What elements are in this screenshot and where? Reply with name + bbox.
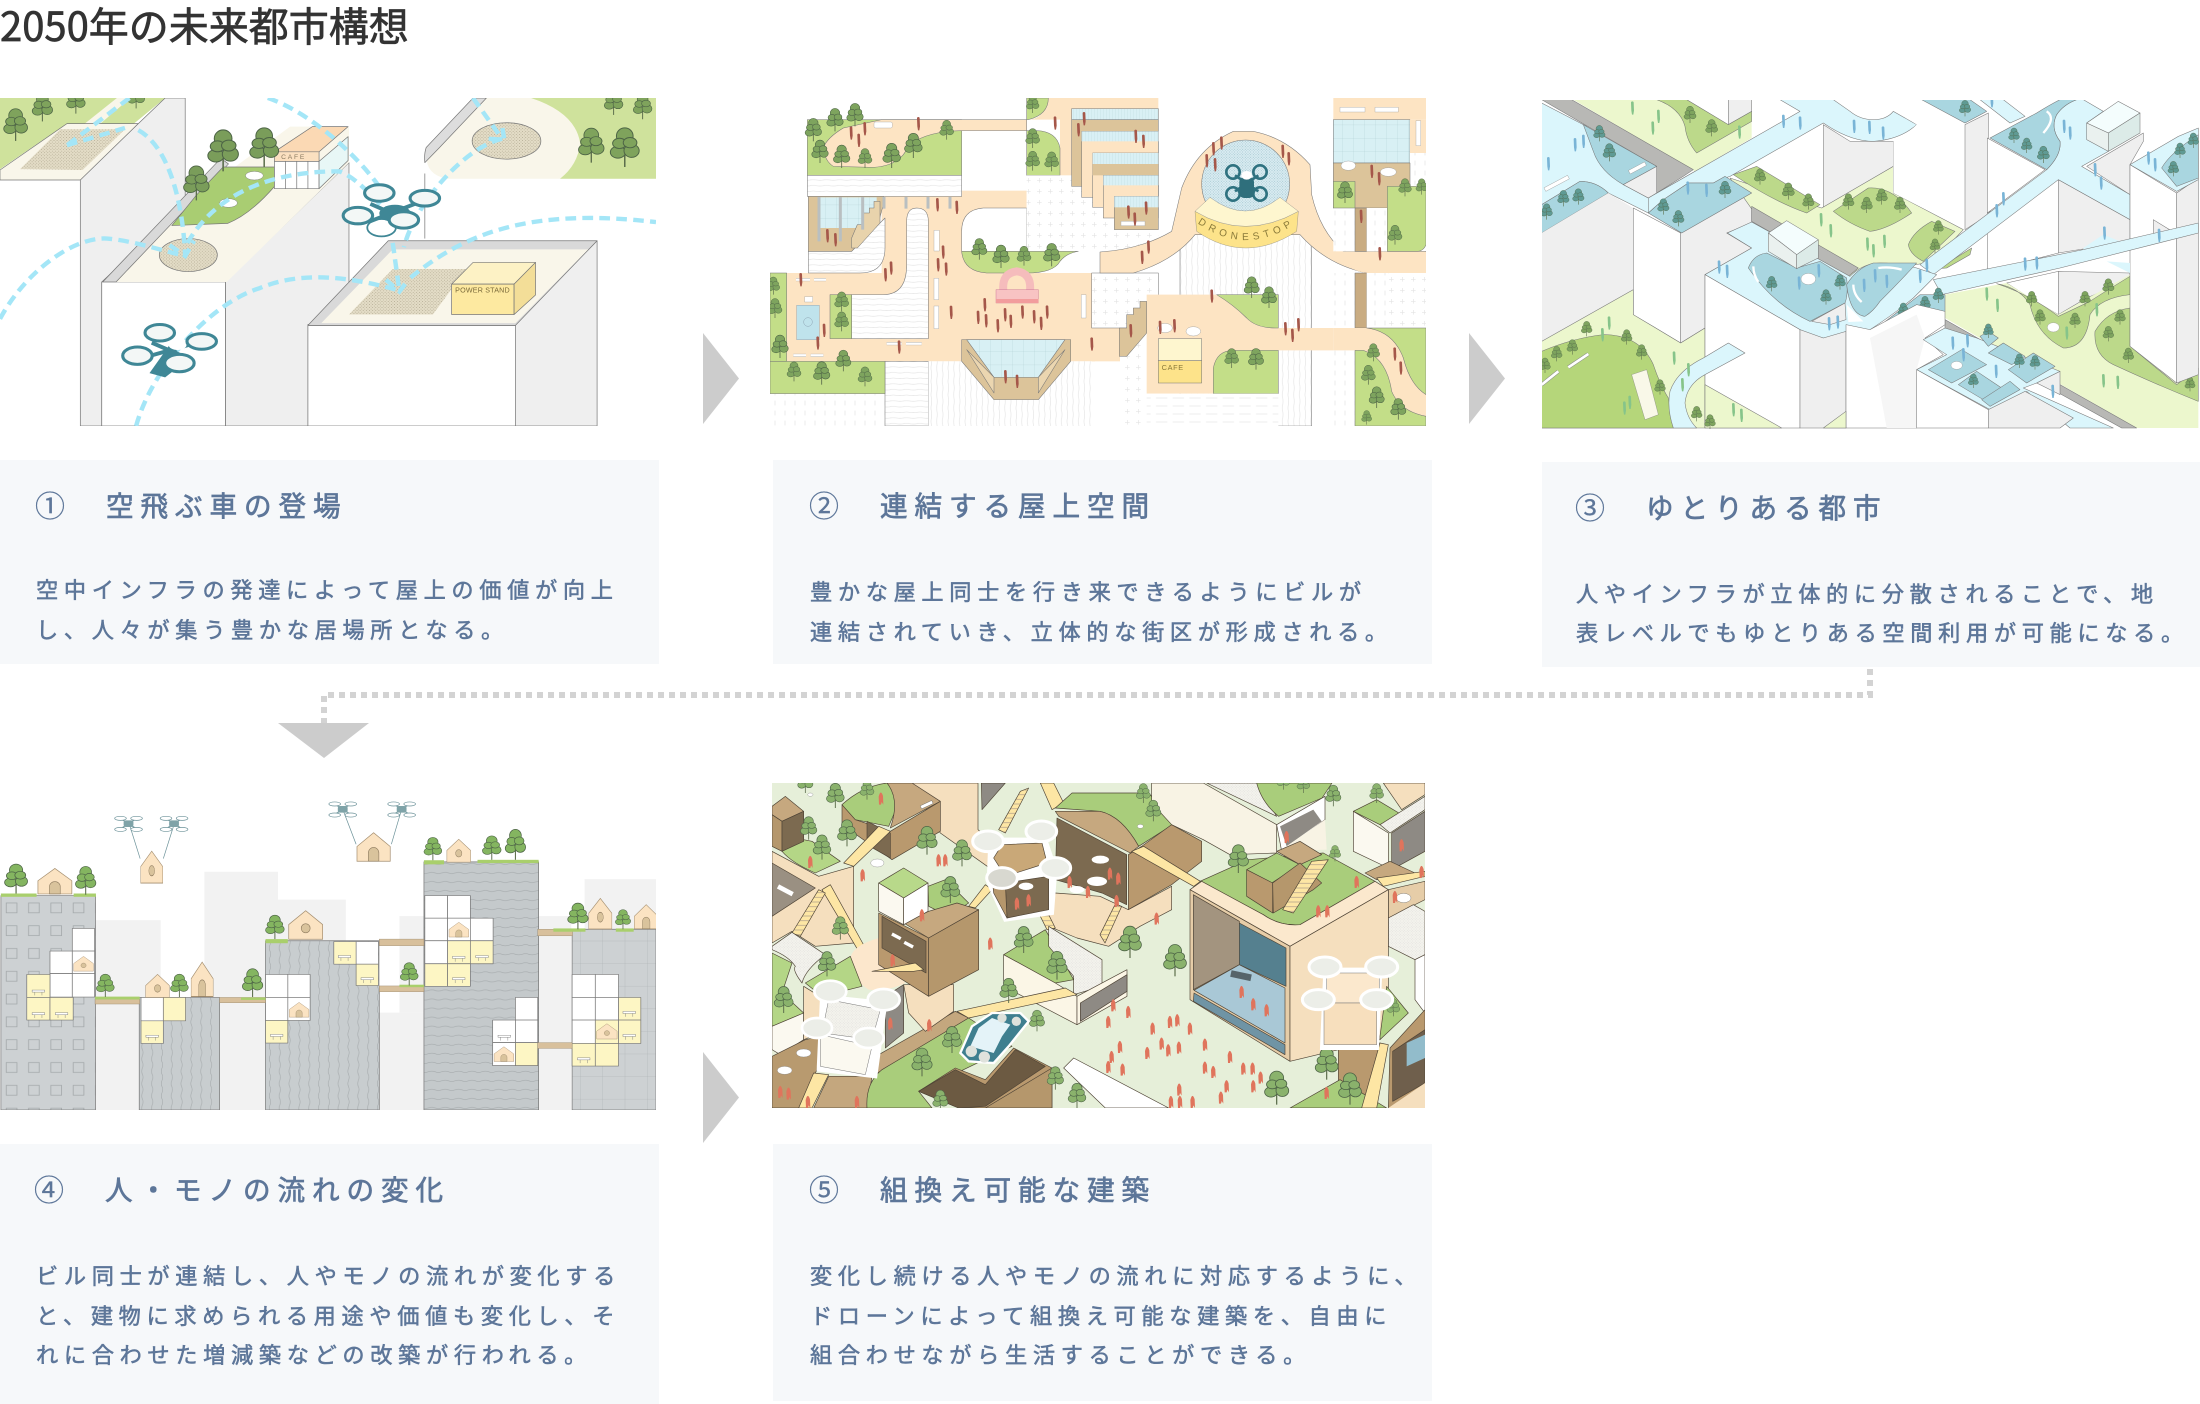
top ground and garden	[1573, 100, 1752, 171]
upper left boxes and lawns	[772, 783, 1064, 908]
flying car upper	[343, 185, 440, 236]
arrow down	[278, 723, 369, 758]
centre tall box with white cube	[872, 868, 979, 1048]
white hatched blocks	[770, 175, 1158, 426]
card 4: ④	[34, 1166, 64, 1210]
card 2	[773, 460, 1432, 664]
dark strip and left road	[1541, 100, 1695, 233]
top right rooftop	[425, 90, 656, 239]
arrow right 1	[703, 333, 739, 424]
trees	[774, 772, 1400, 1111]
illustration 5: reconfigurable modular architecture	[772, 783, 1425, 1108]
small tables	[777, 793, 1143, 1074]
ground	[772, 783, 1425, 1108]
terrace rows	[1072, 109, 1158, 230]
top left rooftop	[0, 85, 165, 180]
card 3: ③	[1575, 484, 1605, 528]
people	[799, 112, 1402, 388]
card 1: 空飛ぶ車の登場	[106, 484, 347, 524]
card 1	[0, 460, 659, 664]
cafe plaza: CAFE	[1162, 363, 1184, 372]
blue and green figures	[1547, 94, 2161, 422]
right building with power stand: POWER STAND	[455, 287, 510, 294]
central lawn	[962, 238, 1078, 273]
building 3	[266, 941, 399, 1110]
illustration 3: isometric spacious city	[1542, 100, 2199, 429]
stepped atrium upper left	[808, 196, 950, 251]
red figures	[778, 792, 1424, 1108]
upper right tower and crossing	[1920, 100, 2143, 275]
cafe plaza	[1119, 277, 1370, 426]
big open building	[1190, 841, 1388, 1061]
building 4	[424, 862, 539, 1110]
lower left ground and lawn	[1540, 290, 1705, 428]
card 5: ドローンによって組換え可能な建築を、自由に	[810, 1299, 1392, 1331]
card 2: 連結する屋上空間	[880, 484, 1156, 524]
drones lifting houses	[115, 802, 415, 883]
card 3: ゆとりある都市	[1646, 486, 1887, 526]
dashed flight paths	[0, 98, 656, 426]
pit building lower centre	[919, 1048, 1169, 1108]
sunken stepped plaza	[962, 340, 1071, 400]
illustration 1: rooftops and flying cars	[0, 98, 656, 426]
illustration 4: changing flow of people and goods skyline	[0, 802, 656, 1110]
flying car	[960, 1013, 1029, 1063]
background pale buildings	[95, 872, 656, 1110]
sports court and gardens left	[767, 273, 922, 394]
drone stop arc road: DRONESTOP	[1198, 218, 1290, 240]
centre white volume	[957, 926, 1127, 1025]
card 5: 組合わせながら生活することができる。	[810, 1338, 1311, 1370]
peach walkway network	[787, 98, 1158, 361]
card 4: ビル同士が連結し、人やモノの流れが変化する	[36, 1259, 621, 1291]
card 5	[773, 1144, 1432, 1401]
card 5: 組換え可能な建築	[880, 1168, 1156, 1208]
peach base areas and roads	[772, 783, 1012, 1108]
flying car lower	[123, 324, 216, 377]
card 4: 人・モノの流れの変化	[105, 1168, 450, 1208]
lower right ground and snake garden	[1945, 271, 2198, 428]
arrow right 3	[703, 1052, 739, 1143]
card 2: 豊かな屋上同士を行き来できるようにビルが	[810, 575, 1367, 607]
pink arch	[996, 271, 1038, 303]
floating module lower left	[802, 981, 900, 1076]
central towers behind road	[1735, 123, 1893, 208]
diagonal sky road	[1648, 100, 1917, 233]
card 3	[1542, 462, 2200, 667]
illustration 2: connected rooftop plan	[770, 98, 1426, 426]
big foreground building	[1669, 275, 1945, 430]
rooftop houses and trees	[5, 829, 658, 997]
centre figure-eight deck	[1705, 221, 1945, 338]
right blocks	[1333, 98, 1427, 426]
building 5	[572, 929, 656, 1110]
bottom right	[1290, 986, 1425, 1108]
building 2	[139, 997, 220, 1110]
left building	[1542, 193, 1752, 343]
top right cream blocks	[1152, 783, 1425, 1013]
middle building with cafe roof: CAFE	[281, 154, 306, 161]
arrow right 2	[1469, 333, 1505, 424]
lower right platform	[1917, 324, 2113, 428]
floating module top centre	[973, 821, 1071, 920]
card 3: 表レベルでもゆとりある空間利用が可能になる。	[1576, 616, 2189, 648]
card 2: ②	[809, 482, 839, 526]
centre green deck	[1730, 166, 1972, 278]
far right tower	[1933, 128, 2199, 383]
card 5: ⑤	[809, 1166, 839, 1210]
right building with power stand	[308, 241, 597, 426]
benches	[934, 230, 1086, 329]
card 1: し、人々が集う豊かな居場所となる。	[36, 613, 509, 645]
upper middle tower	[1893, 100, 2025, 230]
card 2: 連結されていき、立体的な街区が形成される。	[810, 615, 1393, 647]
bridges and green roofs	[1, 860, 634, 1048]
card 1: 空中インフラの発達によって屋上の価値が向上	[36, 573, 619, 605]
left tower	[80, 98, 185, 426]
floating module right	[1302, 957, 1398, 1048]
card 3: 人やインフラが立体的に分散されることで、地	[1576, 577, 2159, 609]
middle building with cafe roof	[102, 127, 349, 426]
building 1	[1, 896, 95, 1110]
top left roof garden	[805, 103, 1027, 175]
card 4	[0, 1144, 659, 1404]
card 1: ①	[35, 482, 65, 526]
card 5: 変化し続ける人やモノの流れに対応するように、	[810, 1259, 1422, 1291]
top garden corner	[1026, 95, 1060, 175]
brown building upper centre and lawn	[1040, 793, 1202, 946]
dotted connector	[321, 669, 1873, 723]
drone stop arc road	[1100, 131, 1426, 426]
card 4: れに合わせた増減築などの改築が行われる。	[36, 1338, 592, 1370]
card 4: と、建物に求められる用途や価値も変化し、そ	[36, 1299, 620, 1331]
